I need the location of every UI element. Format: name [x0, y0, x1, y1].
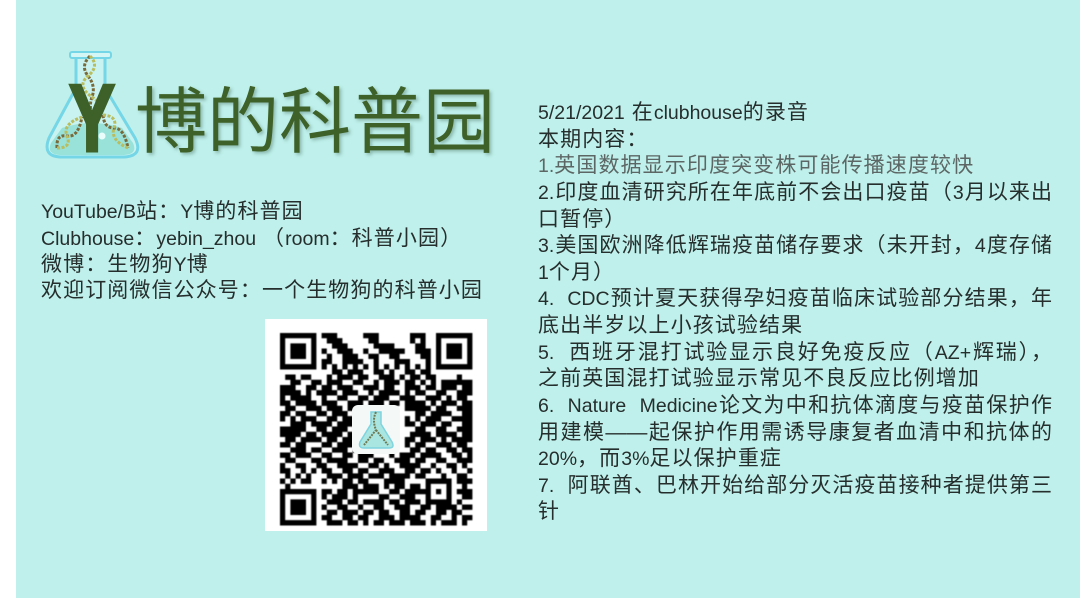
icon: QR centre flask logo	[352, 405, 400, 454]
episode notes panel	[538, 101, 1052, 523]
item 7: 针	[538, 500, 560, 523]
item 6	[538, 394, 1052, 470]
item 7: 7. 阿联酋、巴林开始给部分灭活疫苗接种者提供第三	[538, 474, 1052, 497]
item 4	[538, 287, 1052, 337]
item 3: 3.美国欧洲降低辉瑞疫苗储存要求（未开封，4度存储	[538, 234, 1052, 257]
item 3: 1个月）	[538, 261, 615, 284]
item 2	[538, 181, 1052, 231]
social accounts text block	[41, 200, 483, 302]
item 7	[538, 474, 1052, 523]
item 2: 口暂停）	[538, 208, 626, 231]
item 1: 1.英国数据显示印度突变株可能传播速度较快	[538, 154, 974, 177]
date heading: 5/21/2021 在clubhouse的录音	[538, 101, 809, 124]
icon: flask logo with DNA and letter Y: Y	[69, 64, 115, 170]
item 6: 20%，而3%足以保护重症	[538, 447, 782, 470]
item 4: 底出半岁以上小孩试验结果	[538, 314, 803, 337]
QR modules	[280, 336, 472, 523]
item 3	[538, 234, 1052, 284]
item 2: 2.印度血清研究所在年底前不会出口疫苗（3月以来出	[538, 181, 1052, 204]
item 4: 4. CDC预计夏天获得孕妇疫苗临床试验部分结果，年	[538, 287, 1052, 310]
icon: flask logo with DNA and letter Y	[46, 51, 140, 170]
title: 博的科普园	[135, 63, 495, 168]
item 5: 5. 西班牙混打试验显示良好免疫反应（AZ+辉瑞），	[538, 341, 1052, 364]
item 5	[538, 340, 1052, 390]
contents heading: 本期内容：	[538, 128, 648, 151]
WeChat line: 欢迎订阅微信公众号：一个生物狗的科普小园	[41, 279, 483, 302]
item 5: 之前英国混打试验显示常见不良反应比例增加	[538, 367, 980, 390]
Weibo line: 微博：生物狗Y博	[41, 253, 209, 276]
item 6: 用建模——起保护作用需诱导康复者血清中和抗体的	[538, 421, 1052, 444]
item 6: 6. Nature Medicine论文为中和抗体滴度与疫苗保护作	[538, 394, 1052, 417]
YouTube line: YouTube/B站：Y博的科普园	[41, 200, 304, 223]
Clubhouse line: Clubhouse：yebin_zhou （room：科普小园）	[41, 227, 462, 250]
